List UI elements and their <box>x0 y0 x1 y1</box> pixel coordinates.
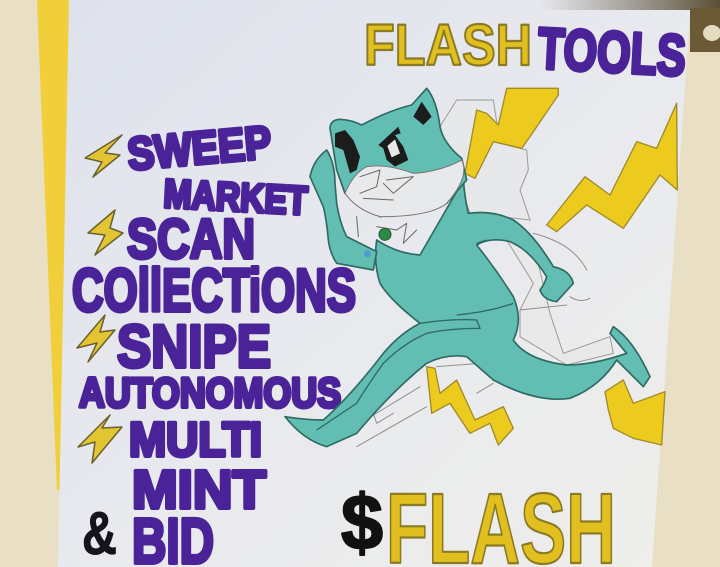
leg and body contour <box>317 240 513 430</box>
raised arm <box>310 150 377 270</box>
bolt at foot <box>605 380 665 445</box>
icon: bolt 1 <box>85 135 122 177</box>
text: SCAN: SCAN <box>127 207 255 270</box>
muzzle <box>345 160 464 217</box>
sketched backpack <box>440 100 530 220</box>
sketched far leg <box>507 240 613 365</box>
head <box>330 88 467 217</box>
text: MINT: MINT <box>132 460 266 520</box>
speed lines <box>343 233 590 447</box>
text: SWEEP: SWEEP <box>125 116 273 180</box>
running cat with bolts <box>285 88 677 447</box>
text: MARKET: MARKET <box>163 172 309 224</box>
text: MULTI: MULTI <box>129 414 262 467</box>
dark object behind poster at top right <box>690 8 720 52</box>
right bolt <box>547 103 677 232</box>
ears <box>413 102 432 125</box>
bolt under leg <box>427 367 513 445</box>
title: FLASHTOOLS <box>364 13 688 89</box>
text: ampersand: & <box>82 500 117 567</box>
icon: bolt 4 <box>78 415 122 463</box>
price label: $FLASH <box>341 473 616 567</box>
collar tag <box>379 228 391 240</box>
price label: $FLASH: $ <box>341 478 383 566</box>
body and limbs <box>285 180 650 447</box>
eye <box>378 127 408 167</box>
shadow band at top right <box>540 0 720 10</box>
text: SNIPE: SNIPE <box>117 313 271 380</box>
icon: bolt 2 <box>88 210 123 255</box>
bolt behind backpack <box>465 88 558 178</box>
icon: bolt 3 <box>77 315 115 362</box>
feature list <box>72 116 356 567</box>
text: AUTONOMOUS: AUTONOMOUS <box>79 369 341 416</box>
paint dab <box>364 251 371 257</box>
yellow backing strip <box>37 0 70 490</box>
text: COLLECTIONS: COllECTiONS <box>72 257 356 324</box>
whisker sketch <box>357 170 417 243</box>
title: FLASHTOOLS: FLASH <box>364 13 532 78</box>
